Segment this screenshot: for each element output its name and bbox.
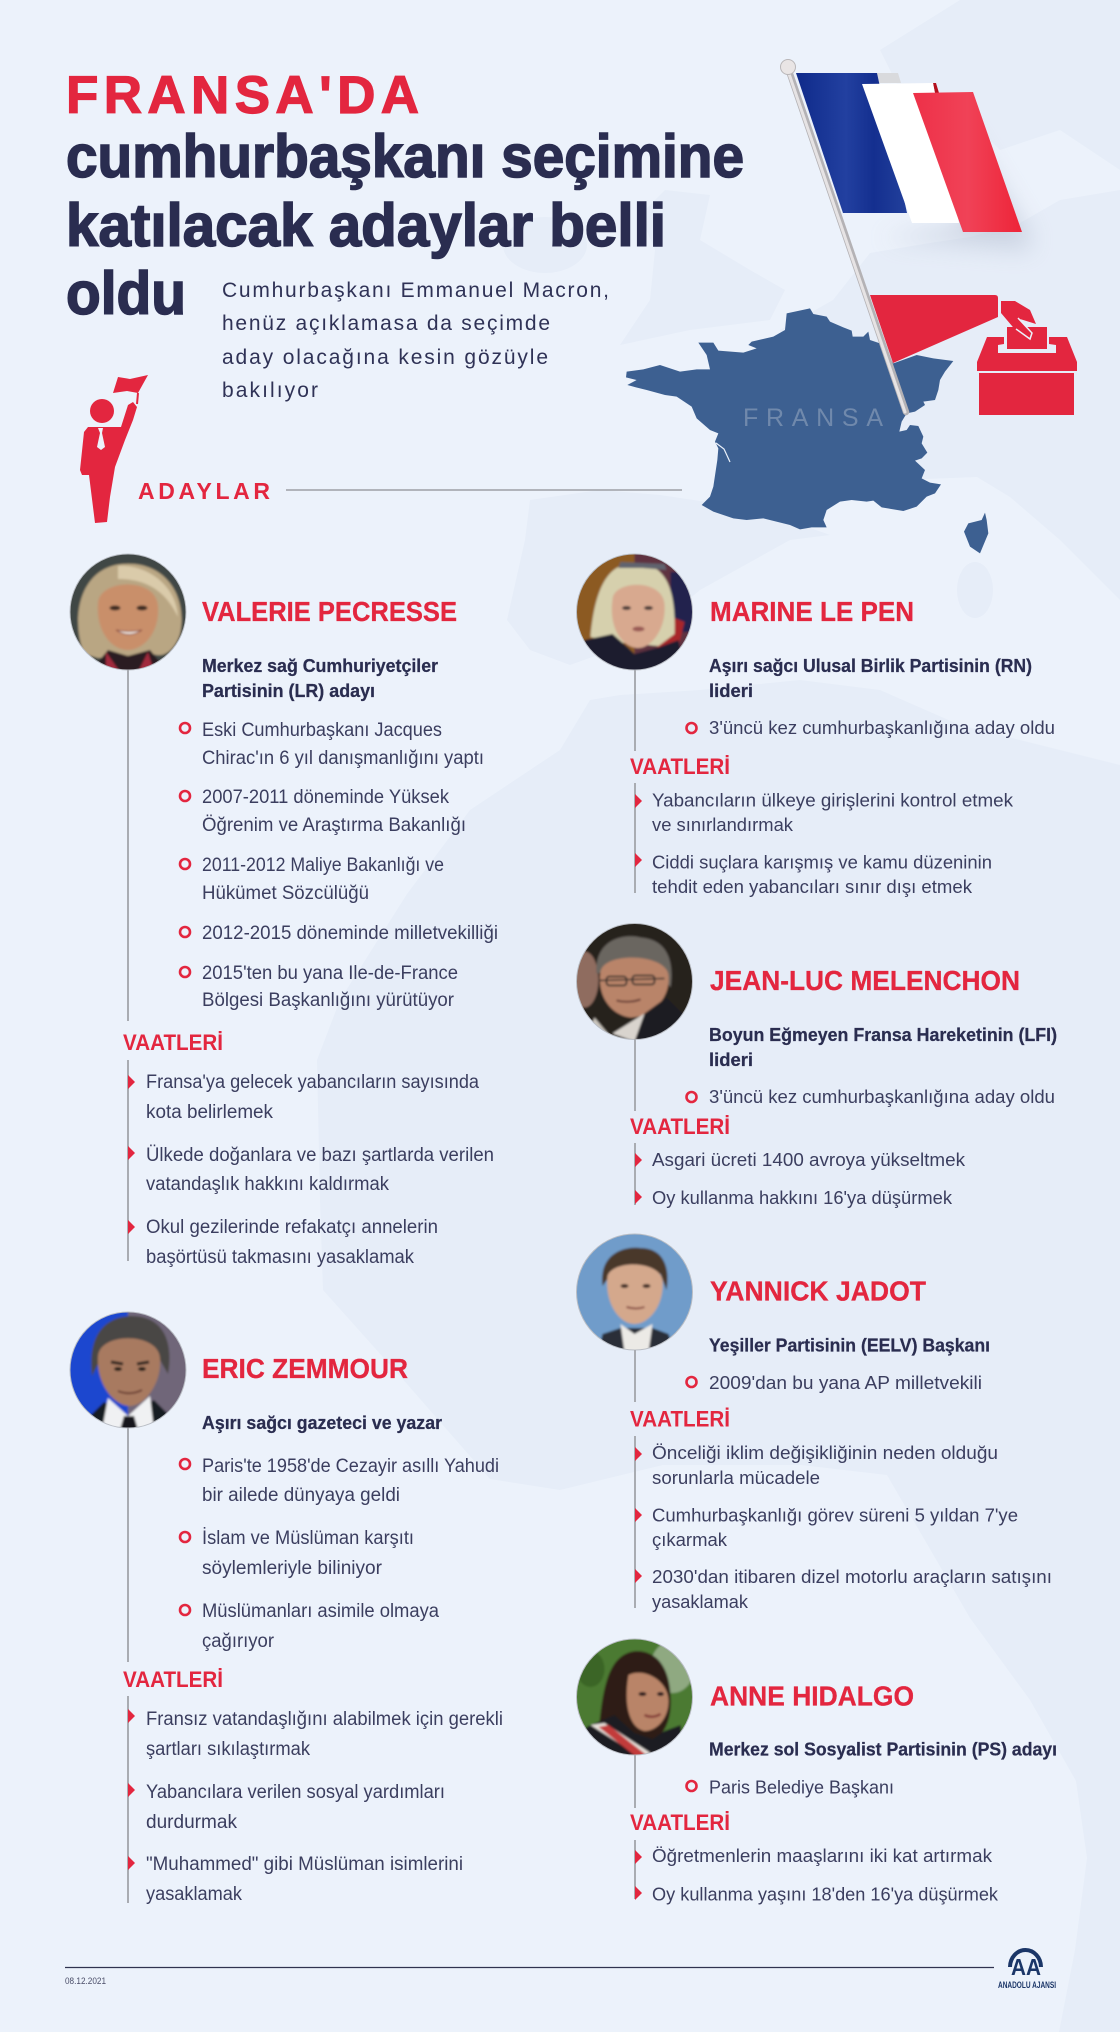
- pledges list: Ciddi suçlara karışmış ve kamu düzeninin: [652, 852, 992, 872]
- pledges list: Fransız vatandaşlığını alabilmek için gerekli: [146, 1709, 503, 1730]
- title: FRANSA'DA: [66, 66, 419, 125]
- title: katılacak adaylar belli: [66, 192, 666, 259]
- intro text: bakılıyor: [222, 379, 318, 402]
- portrait outline: [576, 1234, 692, 1350]
- intro text: aday olacağına kesin gözüyle: [222, 346, 548, 369]
- pledges list: tehdit eden yabancıları sınır dışı etmek: [652, 876, 973, 897]
- pledges list: çıkarmak: [652, 1529, 728, 1550]
- name: JEAN-LUC MELENCHON: [710, 965, 1020, 996]
- photo: Marine Le Pen: [574, 552, 694, 672]
- biography list: 2011-2012 Maliye Bakanlığı ve: [202, 855, 444, 876]
- biography list: Paris'te 1958'de Cezayir asıllı Yahudi: [202, 1456, 499, 1477]
- icon: candidate with flag: [80, 375, 148, 523]
- pledges list: "Muhammed" gibi Müslüman isimlerini: [146, 1854, 463, 1875]
- intro text: [222, 279, 609, 402]
- pledges list: yasaklamak: [652, 1591, 749, 1612]
- biography list: söylemleriyle biliniyor: [202, 1558, 383, 1579]
- flag: France: [780, 60, 1030, 412]
- pledges list: [635, 1149, 966, 1208]
- photo: Yannick Jadot: [574, 1232, 694, 1352]
- heading: VAATLERİ: VAATLERİ: [630, 1406, 730, 1432]
- pledges list: [128, 1072, 494, 1268]
- pledges list: Okul gezilerinde refakatçı annelerin: [146, 1217, 438, 1238]
- pledges list: vatandaşlık hakkını kaldırmak: [146, 1174, 389, 1195]
- pledges list: şartları sıkılaştırmak: [146, 1739, 310, 1760]
- portrait outline: [70, 554, 186, 670]
- biography list: Eski Cumhurbaşkanı Jacques: [202, 720, 442, 741]
- pledges list: Cumhurbaşkanlığı görev süreni 5 yıldan 7'ye: [652, 1504, 1018, 1526]
- biography list: Öğrenim ve Araştırma Bakanlığı: [202, 815, 466, 836]
- party: Yeşiller Partisinin (EELV) Başkanı: [709, 1334, 990, 1356]
- footer line: [65, 1966, 994, 1968]
- pledges list: Önceliği iklim değişikliğinin neden olduğu: [652, 1442, 998, 1463]
- party: Merkez sol Sosyalist Partisinin (PS) adayı: [709, 1738, 1057, 1760]
- biography list: 2015'ten bu yana Ile-de-France: [202, 963, 458, 984]
- map: France: [626, 308, 988, 553]
- photo: Anne Hidalgo: [574, 1637, 694, 1757]
- biography list: [180, 720, 498, 1011]
- pledges list: Asgari ücreti 1400 avroya yükseltmek: [652, 1149, 966, 1170]
- intro text: Cumhurbaşkanı Emmanuel Macron,: [222, 279, 609, 302]
- pledges list: sorunlarla mücadele: [652, 1467, 820, 1488]
- biography list: [180, 1456, 499, 1652]
- party: lideri: [709, 680, 753, 701]
- pledges list: ve sınırlandırmak: [652, 814, 794, 835]
- name: ERIC ZEMMOUR: [202, 1353, 408, 1384]
- biography list: Bölgesi Başkanlığını yürütüyor: [202, 990, 455, 1011]
- heading: VAATLERİ: VAATLERİ: [630, 754, 730, 779]
- intro text: henüz açıklamasa da seçimde: [222, 312, 550, 335]
- pledges list: [635, 790, 1014, 897]
- panel: Marine Le Pen: [574, 552, 1055, 897]
- pledges list: 2030'dan itibaren dizel motorlu araçların satışını: [652, 1566, 1052, 1587]
- biography list: Müslümanları asimile olmaya: [202, 1601, 439, 1622]
- heading: VAATLERİ: VAATLERİ: [123, 1030, 223, 1055]
- heading: VAATLERİ: VAATLERİ: [123, 1667, 223, 1692]
- logo: Anadolu Ajansi: AA: [1011, 1954, 1041, 1980]
- pledges list: Oy kullanma hakkını 16'ya düşürmek: [652, 1187, 953, 1208]
- biography list: 2012-2015 döneminde milletvekilliği: [202, 923, 498, 944]
- name: VALERIE PECRESSE: [202, 596, 457, 627]
- title: oldu: [66, 260, 186, 327]
- logo: Anadolu Ajansi: ANADOLU AJANSI: [998, 1980, 1056, 1990]
- name: ANNE HIDALGO: [710, 1680, 914, 1712]
- portrait outline: [70, 1312, 186, 1428]
- heading: VAATLERİ: VAATLERİ: [630, 1114, 730, 1139]
- background world map: [317, 0, 1120, 2032]
- map: France: FRANSA: [743, 404, 883, 432]
- name: YANNICK JADOT: [710, 1276, 926, 1306]
- biography: 3'üncü kez cumhurbaşkanlığına aday oldu: [709, 717, 1055, 738]
- photo: Valerie Pecresse: [68, 552, 188, 672]
- party: Aşırı sağcı Ulusal Birlik Partisinin (RN): [709, 655, 1032, 676]
- pledges list: başörtüsü takmasını yasaklamak: [146, 1247, 414, 1268]
- biography: 3'üncü kez cumhurbaşkanlığına aday oldu: [709, 1086, 1055, 1107]
- party: Boyun Eğmeyen Fransa Hareketinin (LFI): [709, 1024, 1057, 1045]
- biography list: çağırıyor: [202, 1631, 275, 1652]
- pledges list: [128, 1709, 503, 1905]
- pledges list: durdurmak: [146, 1812, 237, 1833]
- pledges list: Fransa'ya gelecek yabancıların sayısında: [146, 1072, 479, 1093]
- party: [709, 655, 1032, 701]
- biography list: Hükümet Sözcülüğü: [202, 883, 369, 904]
- panel: Anne Hidalgo: [574, 1637, 1057, 1904]
- party: [202, 655, 438, 701]
- pledges list: kota belirlemek: [146, 1102, 273, 1123]
- biography: 2009'dan bu yana AP milletvekili: [709, 1372, 982, 1393]
- pledges list: Yabancılara verilen sosyal yardımları: [146, 1782, 445, 1803]
- panel: Jean-Luc Melenchon: [570, 922, 1057, 1208]
- portrait outline: [576, 1639, 692, 1755]
- party: lideri: [709, 1049, 753, 1070]
- title: cumhurbaşkanı seçimine: [66, 123, 744, 190]
- biography list: bir ailede dünyaya geldi: [202, 1485, 400, 1506]
- pledges list: Yabancıların ülkeye girişlerini kontrol etmek: [652, 790, 1014, 810]
- photo: Eric Zemmour: [68, 1310, 188, 1430]
- pledges list: Oy kullanma yaşını 18'den 16'ya düşürmek: [652, 1884, 999, 1904]
- biography list: Chirac'ın 6 yıl danışmanlığını yaptı: [202, 748, 484, 769]
- date: 08.12.2021: [65, 1976, 106, 1987]
- biography list: İslam ve Müslüman karşıtı: [202, 1528, 414, 1549]
- biography: Paris Belediye Başkanı: [709, 1776, 894, 1798]
- pledges list: [635, 1442, 1052, 1612]
- party: Partisinin (LR) adayı: [202, 680, 375, 701]
- pledges list: Ülkede doğanlara ve bazı şartlarda verilen: [146, 1145, 494, 1166]
- icon: hand and ballot box: [870, 295, 1077, 415]
- party: Aşırı sağcı gazeteci ve yazar: [202, 1412, 442, 1433]
- logo: Anadolu Ajansi: [998, 1950, 1056, 1990]
- party: [709, 1024, 1057, 1070]
- photo: Jean-Luc Melenchon: [577, 924, 692, 1039]
- panel: Yannick Jadot: [574, 1232, 1052, 1612]
- pledges list: [635, 1845, 999, 1904]
- party: Merkez sağ Cumhuriyetçiler: [202, 655, 438, 676]
- title: [66, 66, 744, 327]
- portrait outline: [576, 924, 692, 1040]
- name: MARINE LE PEN: [710, 596, 914, 627]
- pledges list: yasaklamak: [146, 1884, 242, 1905]
- heading: ADAYLAR: ADAYLAR: [138, 478, 270, 504]
- heading: VAATLERİ: VAATLERİ: [630, 1810, 730, 1835]
- portrait outline: [576, 554, 692, 670]
- panel: Eric Zemmour: [68, 1310, 503, 1905]
- panel: Valerie Pecresse: [68, 552, 498, 1268]
- biography list: 2007-2011 döneminde Yüksek: [202, 787, 449, 808]
- pledges list: Öğretmenlerin maaşlarını iki kat artırmak: [652, 1845, 993, 1866]
